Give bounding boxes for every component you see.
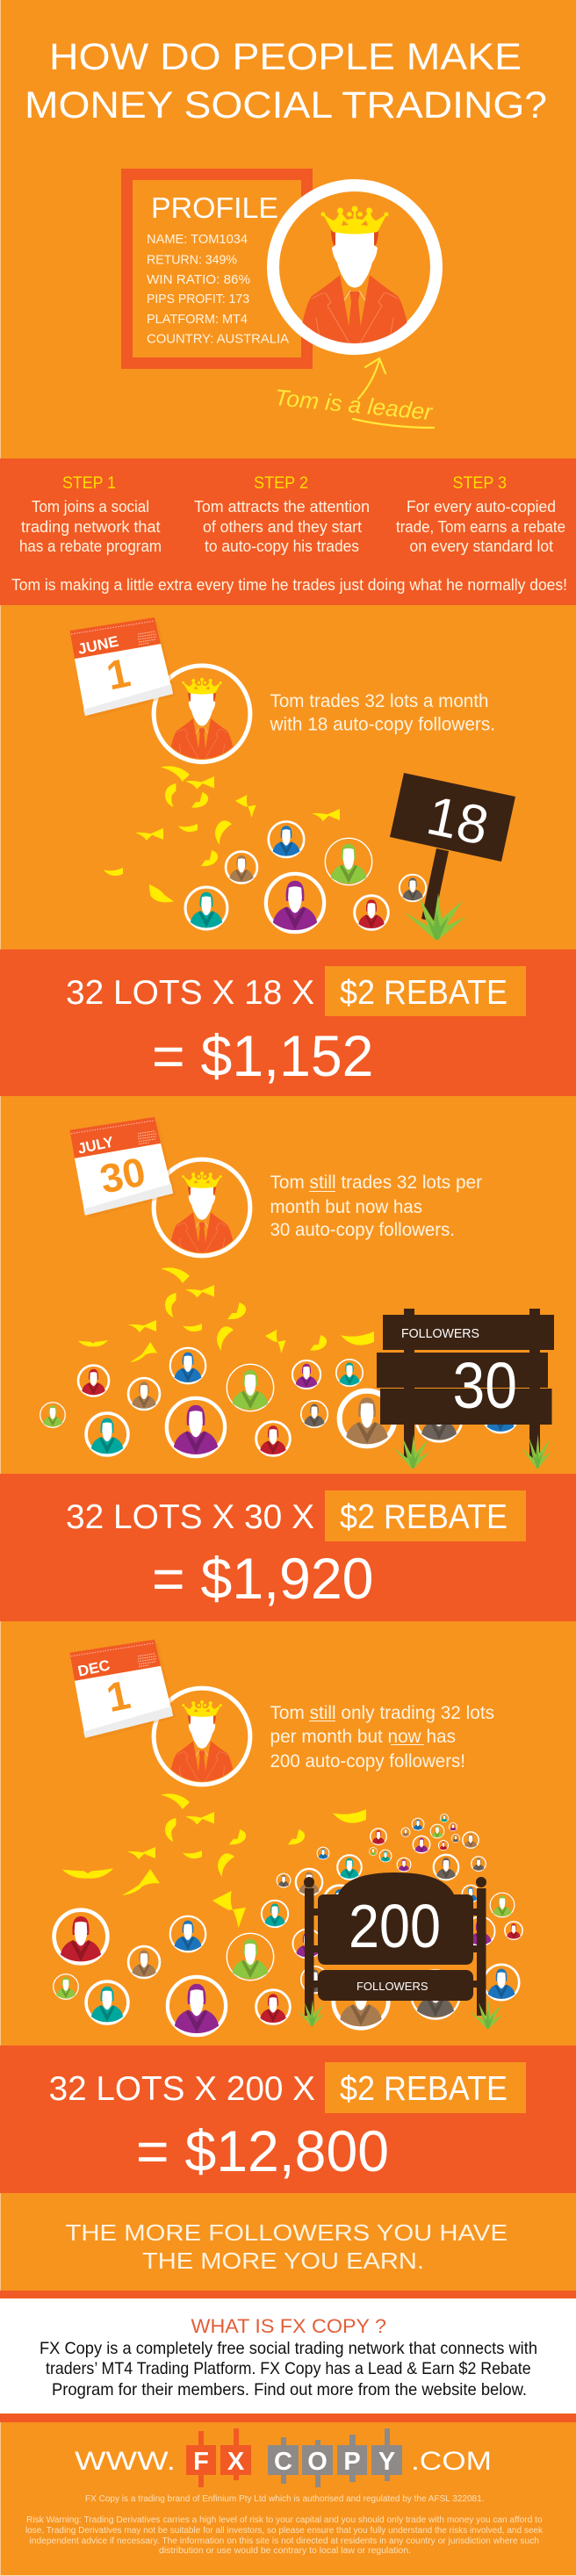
text: July description: Tom still trades 32 lots per: [270, 1172, 482, 1193]
closing statement: THE MORE YOU EARN.: [142, 2249, 424, 2274]
description: [40, 2339, 537, 2399]
total: = $1,920: [152, 1546, 374, 1611]
equation band: December: 32 LOTS X 200 X: [49, 2070, 315, 2108]
sign: 30 followers: 30: [453, 1349, 517, 1422]
logo: www.fxcopy.com: [75, 2428, 492, 2487]
icon: Tom portrait: [154, 666, 250, 762]
step 2: of others and they start: [203, 518, 362, 536]
icon: calendar July 30: JULY: [76, 1133, 116, 1158]
text: June description: with 18 auto-copy followers.: [270, 714, 495, 735]
profile heading: PROFILE: [151, 191, 278, 224]
legal text: independent advice if necessary. The information on this site is not directed at residents in any country or jurisdiction where such: [30, 2536, 539, 2546]
step 3: trade, Tom earns a rebate: [396, 518, 565, 536]
annotation: Tom is a leader: [273, 358, 435, 428]
text: December description: [270, 1702, 494, 1771]
step 3: [396, 473, 565, 555]
description: FX Copy is a completely free social trading network that connects with: [40, 2339, 537, 2358]
step 3: on every standard lot: [409, 538, 553, 555]
icon: Tom portrait: [154, 1688, 250, 1785]
step 2: Tom attracts the attention: [194, 498, 370, 516]
icon: calendar Dec 1: DEC: [76, 1656, 112, 1680]
icon: calendar June 1: JUNE: [76, 633, 120, 658]
step 1: [19, 473, 162, 555]
rebate box: [325, 966, 526, 1016]
heading: WHAT IS FX COPY ?: [191, 2315, 386, 2337]
flying money shapes: [62, 1793, 366, 1928]
section: July: [40, 1117, 554, 1468]
equation band: December: [0, 2046, 576, 2193]
icon: calendar July 30: 30: [96, 1148, 149, 1202]
candles: FX: [186, 2428, 251, 2487]
logo letters: P: [343, 2448, 361, 2476]
followers: [40, 1348, 518, 1456]
annotation: Tom is a leader: Tom is a leader: [273, 384, 435, 425]
description: traders’ MT4 Trading Platform. FX Copy has a Lead & Earn $2 Rebate: [46, 2359, 531, 2378]
profile stats: PLATFORM: MT4: [147, 312, 248, 327]
profile stats: [147, 232, 289, 346]
profile stats: PIPS PROFIT: 173: [147, 292, 249, 307]
logo letters: C: [274, 2448, 292, 2476]
sign: 200 followers: FOLLOWERS: [356, 1980, 428, 1993]
equation band: July: 32 LOTS X 30 X: [66, 1498, 314, 1536]
icon: Tom portrait: [154, 1159, 250, 1256]
text: July description: month but now has: [270, 1196, 422, 1217]
icon: calendar July 30: [70, 1117, 176, 1218]
total: = $1,152: [152, 1023, 374, 1088]
step 3: For every auto-copied: [407, 498, 556, 516]
legal text: FX Copy is a trading brand of Enfinium Pty Ltd which is authorised and regulated by the AFSL 322081.: [85, 2494, 485, 2504]
followers: [185, 821, 426, 932]
flying money shapes: [78, 1267, 374, 1362]
equation band: June: 32 LOTS X 18 X: [66, 974, 314, 1012]
step 1: has a rebate program: [19, 538, 162, 555]
title: HOW DO PEOPLE MAKE: [49, 36, 522, 78]
icon: Tom portrait: [273, 185, 436, 349]
candles: COPY: [268, 2428, 402, 2487]
logo letters: O: [307, 2448, 328, 2476]
sign: 200 followers: [298, 1872, 504, 2029]
legal text: [25, 2494, 544, 2556]
section: December: [54, 1640, 522, 2035]
sign: 30 followers: [377, 1309, 554, 1468]
logo: www.fxcopy.com: .COM: [411, 2447, 492, 2476]
rebate box: $2 REBATE: [340, 974, 508, 1012]
step 1: STEP 1: [62, 473, 116, 493]
legal text: Risk Warning: Trading Derivatives carries a high level of risk to your capital and you should only trade with money you can afford to: [26, 2515, 543, 2525]
sign: 30 followers: FOLLOWERS: [401, 1326, 479, 1341]
closing statement: [65, 2221, 508, 2274]
icon: calendar Dec 1: [70, 1640, 176, 1741]
logo letters: Y: [378, 2448, 395, 2476]
equation band: June: [0, 949, 576, 1096]
rebate box: [325, 2062, 526, 2113]
total: = $12,800: [136, 2118, 389, 2183]
rebate box: $2 REBATE: [340, 1498, 508, 1536]
steps summary: Tom is making a little extra every time he trades just doing what he normally does!: [11, 576, 567, 594]
logo letters: X: [227, 2448, 245, 2476]
profile stats: RETURN: 349%: [147, 253, 237, 267]
text: December description: per month but now has: [270, 1726, 456, 1747]
title: MONEY SOCIAL TRADING?: [25, 84, 547, 126]
followers: [54, 1814, 522, 2035]
equation band: July: [0, 1474, 576, 1621]
title: [25, 36, 547, 126]
legal text: lose. Trading Derivatives may not be suitable for all investors, so please ensure that you fully understand the risks involved, and seek: [25, 2526, 544, 2536]
sign: 18 followers: 18: [421, 785, 493, 857]
profile stats: NAME: TOM1034: [147, 232, 248, 247]
step 2: [194, 473, 370, 555]
rebate box: $2 REBATE: [340, 2070, 508, 2108]
closing statement: THE MORE FOLLOWERS YOU HAVE: [65, 2221, 508, 2246]
icon: calendar Dec 1: 1: [103, 1671, 134, 1721]
panel: what is FX Copy: [0, 2291, 576, 2422]
sign: 18 followers: [390, 773, 515, 940]
legal text: distribution or use would be contrary to local law or regulation.: [159, 2546, 411, 2556]
text: December description: 200 auto-copy followers!: [270, 1750, 465, 1771]
profile stats: COUNTRY: AUSTRALIA: [147, 332, 289, 346]
text: December description: Tom still only trading 32 lots: [270, 1702, 494, 1723]
step 3: STEP 3: [453, 473, 507, 493]
logo letters: [193, 2448, 395, 2476]
logo letters: F: [193, 2448, 209, 2476]
step 1: Tom joins a social: [32, 498, 149, 516]
description: Program for their members. Find out more from the website below.: [52, 2380, 527, 2399]
panel: profile card: [126, 174, 307, 364]
section: June: [70, 617, 515, 940]
icon: calendar June 1: 1: [103, 649, 134, 698]
text: July description: [270, 1172, 482, 1240]
step 2: to auto-copy his trades: [205, 538, 359, 555]
rebate box: [325, 1490, 526, 1541]
panel: steps: [0, 458, 576, 605]
profile stats: WIN RATIO: 86%: [147, 272, 250, 287]
text: June description: [270, 690, 495, 735]
sign: 200 followers: 200: [349, 1892, 441, 1960]
logo: www.fxcopy.com: WWW.: [75, 2447, 176, 2476]
flying money shapes: [104, 766, 340, 902]
step 1: trading network that: [21, 518, 160, 536]
text: July description: 30 auto-copy followers.: [270, 1219, 455, 1240]
step 2: STEP 2: [254, 473, 308, 493]
text: June description: Tom trades 32 lots a month: [270, 690, 488, 711]
arrow: [358, 358, 385, 399]
icon: calendar June 1: [70, 617, 176, 718]
